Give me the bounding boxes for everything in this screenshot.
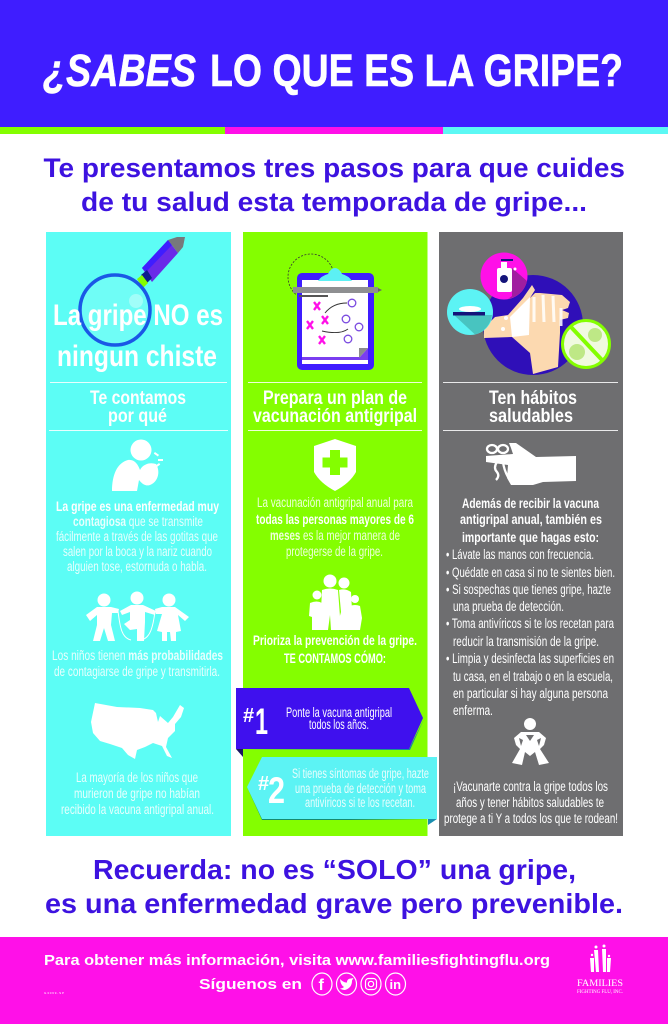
text: además de recibir la vacuna: importante que hagas esto: — [462, 530, 599, 545]
subtitle: de tu salud esta temporada de gripe... — [81, 187, 587, 217]
closing message: Recuerda: no es “SOLO” una gripe, — [93, 854, 576, 885]
title: ¿SABES — [43, 45, 196, 96]
footer text: G3069-SP — [44, 991, 64, 995]
icon: person coughing — [112, 440, 163, 491]
icon: clipboard — [288, 254, 382, 370]
icon: superhero — [512, 718, 549, 765]
callout: step 1: todos los años. — [309, 717, 369, 732]
subheading: te contamos por qué — [90, 388, 186, 427]
subtitle: Te presentamos tres pasos para que cuides — [44, 153, 625, 183]
subheading: prepara un plan de vacunación antigripal: Prepara un plan de — [263, 388, 407, 409]
text: vacunación anual — [256, 495, 414, 559]
callout: step 1: 1 — [255, 701, 268, 742]
icons: social media — [312, 973, 406, 995]
text: vacunación anual: meses es la mejor manera de — [270, 528, 400, 543]
icon: hand with ribbon on finger — [486, 443, 576, 485]
list: hábitos saludables: en particular si hay alguna persona — [453, 686, 608, 701]
footer text: Síguenos en — [199, 976, 302, 993]
subheading: te contamos por qué: por qué — [108, 406, 167, 427]
callout: step 2: antivíricos si te los recetan. — [305, 795, 415, 810]
footer band — [0, 937, 668, 1024]
text: mayoría de los niños: La mayoría de los niños que — [76, 770, 198, 785]
logo: families fighting flu: FIGHTING FLU, INC. — [577, 990, 623, 995]
text: contagiosa: fácilmente a través de las gotitas que — [56, 529, 218, 544]
heading: la gripe no es ningun chiste — [53, 299, 223, 373]
text: contagiosa: salen por la boca y la nariz cuando — [63, 544, 212, 559]
list: hábitos saludables: reducir la transmisión de la gripe. — [453, 634, 599, 649]
text: vacunación anual: todas las personas mayores de 6 — [256, 512, 414, 527]
icon: family — [309, 574, 362, 630]
closing message: es una enfermedad grave pero prevenible. — [45, 888, 623, 919]
heading: la gripe no es ningun chiste: La gripe NO es — [53, 299, 223, 332]
callout: step 2: 2 — [268, 770, 285, 811]
text: niños: Los niños tienen más probabilidades — [52, 648, 223, 663]
icon: magnifying glass — [80, 237, 185, 345]
text: contagiosa: La gripe es una enfermedad muy — [56, 499, 219, 514]
text: vacunarte — [444, 779, 618, 826]
text: vacunación anual: protegerse de la gripe. — [286, 544, 383, 559]
text: prioriza la prevención: Prioriza la prevención de la gripe. — [253, 633, 417, 648]
subtitle — [44, 153, 625, 217]
list: hábitos saludables: una prueba de detección. — [453, 599, 564, 614]
subheading: prepara un plan de vacunación antigripal — [253, 388, 417, 427]
icon: hand washing — [447, 252, 610, 375]
header banner — [0, 0, 668, 134]
text: mayoría de los niños: recibido la vacuna antigripal anual. — [61, 802, 214, 817]
list: hábitos saludables — [446, 547, 615, 718]
text: contagiosa: contagiosa que se transmite — [73, 514, 203, 529]
text: prioriza la prevención: TE CONTAMOS CÓMO: — [284, 651, 386, 666]
callout: step 1: Ponte la vacuna antigripal — [286, 705, 392, 720]
panel: prepara un plan — [243, 232, 428, 836]
text: contagiosa — [56, 499, 219, 574]
text: niños — [52, 648, 223, 679]
text: mayoría de los niños: murieron de gripe no habían — [74, 786, 200, 801]
footer text: Para obtener más información, visita www.familiesfightingflu.org — [44, 952, 550, 969]
callout: step 2 — [247, 757, 437, 825]
subheading: ten hábitos saludables: Ten hábitos — [489, 388, 577, 409]
text: prioriza la prevención — [253, 633, 417, 666]
callout: step 2: Si tienes síntomas de gripe, hazte — [292, 766, 429, 781]
text: además de recibir la vacuna: antigripal anual, también es — [460, 512, 602, 527]
text: contagiosa: alguien tose, estornuda o habla. — [67, 559, 207, 574]
text: mayoría de los niños — [61, 770, 214, 817]
panel: la gripe no es ningun chiste — [46, 232, 231, 836]
text: vacunarte: años y tener hábitos saludables te — [456, 795, 604, 810]
subheading: prepara un plan de vacunación antigripal: vacunación antigripal — [253, 406, 417, 427]
callout: step 1 — [236, 688, 424, 757]
icons: social media: f — [318, 977, 324, 994]
logo: families fighting flu — [577, 944, 623, 995]
closing message — [45, 854, 623, 919]
logo: families fighting flu: FAMILIES — [577, 978, 623, 988]
text: además de recibir la vacuna: Además de recibir la vacuna — [462, 496, 599, 511]
text: además de recibir la vacuna — [460, 496, 602, 545]
text: vacunarte: ¡Vacunarte contra la gripe todos los — [453, 779, 608, 794]
text: niños: de contagiarse de gripe y transmitirla. — [54, 664, 220, 679]
icon: children jumping rope — [86, 592, 189, 641]
callout: step 1: # — [243, 705, 254, 727]
list: hábitos saludables: • Lávate las manos con frecuencia. — [446, 547, 594, 562]
subheading: ten hábitos saludables — [489, 388, 577, 427]
callout: step 2: # — [258, 773, 269, 795]
text: vacunación anual: La vacunación antigripal anual para — [257, 495, 413, 510]
icons: social media: in — [390, 977, 401, 992]
icon: shield with cross — [314, 439, 356, 491]
list: hábitos saludables: enferma. — [453, 703, 493, 718]
footer text — [44, 952, 550, 995]
icon: map of the united states — [91, 703, 184, 759]
heading: la gripe no es ningun chiste: ningun chiste — [57, 340, 217, 373]
callout: step 2: una prueba de detección y toma — [295, 781, 426, 796]
subheading: ten hábitos saludables: saludables — [489, 406, 573, 427]
subheading: te contamos por qué: Te contamos — [90, 388, 186, 409]
title — [43, 45, 623, 96]
panel: ten hábitos saludables — [439, 232, 623, 836]
